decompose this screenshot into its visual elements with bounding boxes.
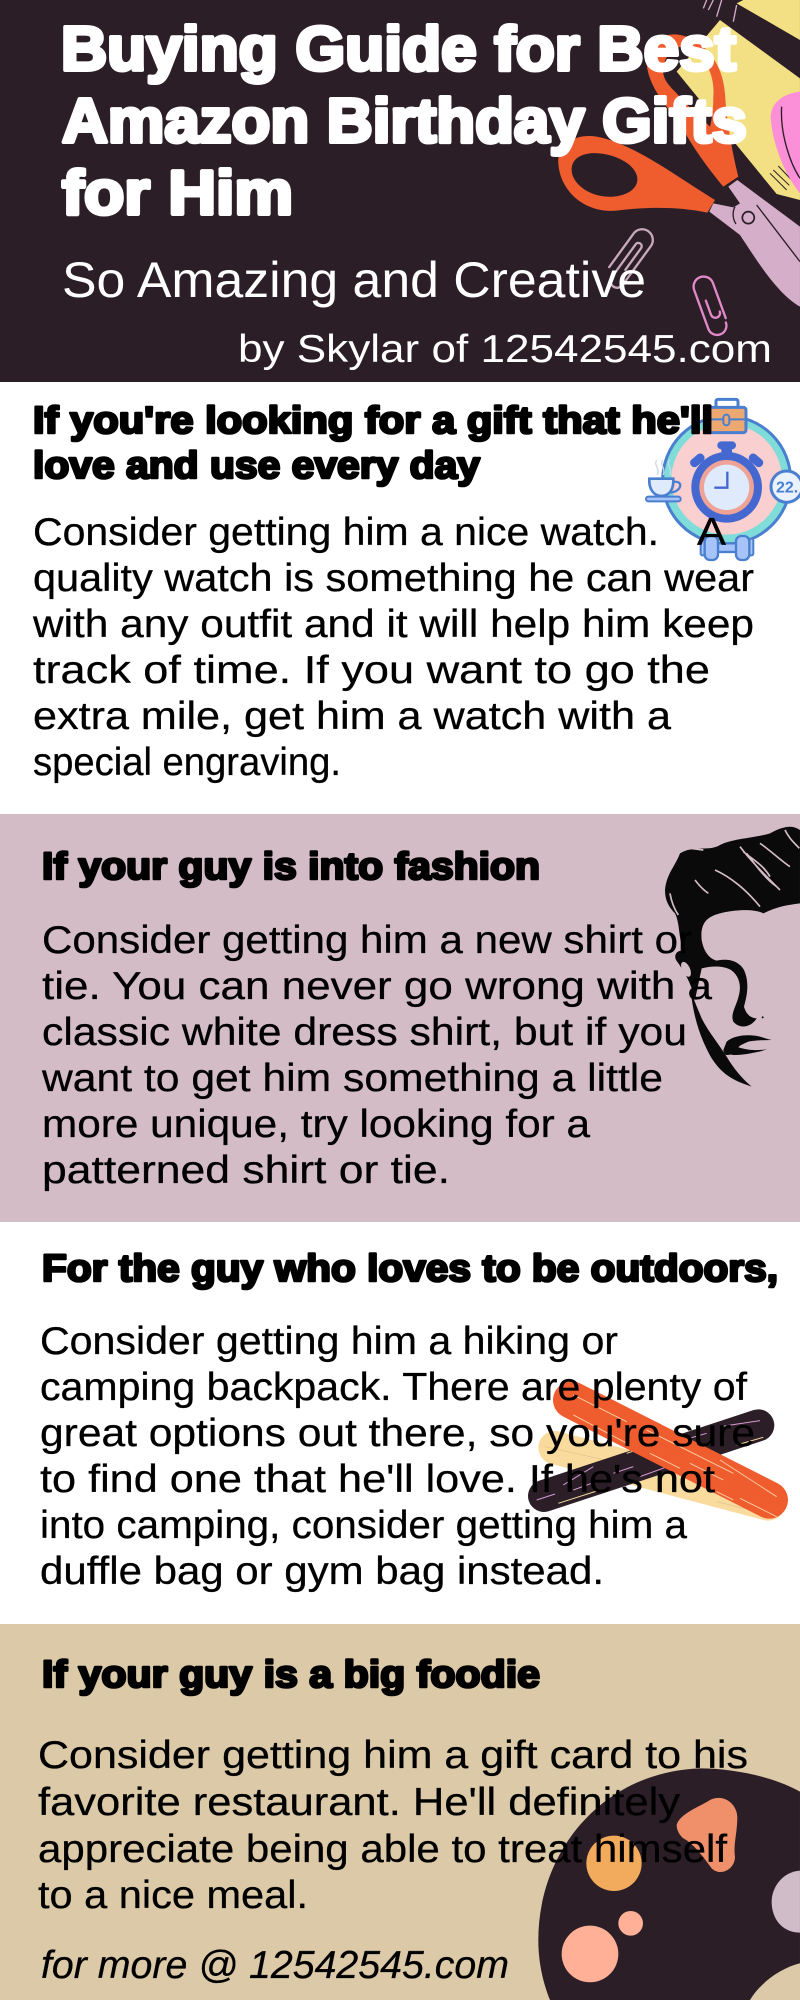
body text: patterned shirt or tie.	[42, 1149, 450, 1192]
icon: stopwatch with daily routine items	[646, 399, 800, 560]
panel: everyday gift	[0, 382, 800, 814]
body text: extra mile, get him a watch with a	[33, 695, 671, 738]
body text: A	[697, 511, 726, 554]
body text: duffle bag or gym bag instead.	[40, 1550, 604, 1593]
body text: tie. You can never go wrong with a	[42, 965, 712, 1008]
heading: For the guy who loves to be outdoors,	[42, 1248, 778, 1290]
title: for Him	[62, 159, 293, 228]
body text: Consider getting him a new shirt or	[42, 919, 692, 962]
illustration: man's face with swept hair	[665, 827, 800, 1087]
illustration: crossed sticks	[537, 1395, 777, 1517]
panel: fashion	[0, 814, 800, 1222]
heading: If your guy is into fashion	[42, 846, 540, 888]
body text: more unique, try looking for a	[42, 1103, 590, 1146]
illustration: scissors, notebook and paperclips	[558, 0, 800, 338]
footer link text: for more @ 12542545.com	[41, 1944, 509, 1987]
heading	[33, 400, 713, 487]
title: Buying Guide for Best	[61, 15, 736, 84]
body text	[32, 511, 754, 784]
illustration: dark blob with spots	[538, 1768, 800, 2000]
body text: into camping, consider getting him a	[40, 1504, 687, 1547]
body text	[40, 1320, 755, 1593]
panel: foodie	[0, 1624, 800, 2000]
body text: special engraving.	[33, 741, 341, 784]
heading: love and use every day	[33, 445, 480, 487]
title: Amazon Birthday Gifts	[62, 87, 747, 156]
body text: want to get him something a little	[41, 1057, 663, 1100]
body text: to a nice meal.	[38, 1874, 308, 1917]
body text: favorite restaurant. He'll definitely	[38, 1781, 681, 1824]
body text: with any outfit and it will help him keep	[32, 603, 754, 646]
body text: Consider getting him a gift card to his	[38, 1734, 748, 1777]
icon: stopwatch with daily routine items: 22.	[776, 480, 798, 497]
heading: If you're looking for a gift that he'll	[33, 400, 713, 442]
panel: header	[0, 0, 800, 382]
body text: camping backpack. There are plenty of	[40, 1366, 747, 1409]
subtitle: So Amazing and Creative	[62, 252, 646, 308]
body text: quality watch is something he can wear	[33, 557, 754, 600]
body text: great options out there, so you're sure	[40, 1412, 755, 1455]
body text: Consider getting him a nice watch.	[33, 511, 659, 554]
body text: Consider getting him a hiking or	[40, 1320, 618, 1363]
body text: classic white dress shirt, but if you	[42, 1011, 687, 1054]
panel: outdoors	[0, 1222, 800, 1624]
body text: track of time. If you want to go the	[33, 649, 710, 692]
byline: by Skylar of 12542545.com	[238, 328, 772, 371]
body text: to find one that he'll love. If he's not	[40, 1458, 715, 1501]
body text: appreciate being able to treat himself	[38, 1828, 727, 1871]
title	[61, 15, 747, 228]
heading: If your guy is a big foodie	[42, 1654, 540, 1696]
body text	[38, 1734, 748, 1917]
body text	[41, 919, 712, 1192]
